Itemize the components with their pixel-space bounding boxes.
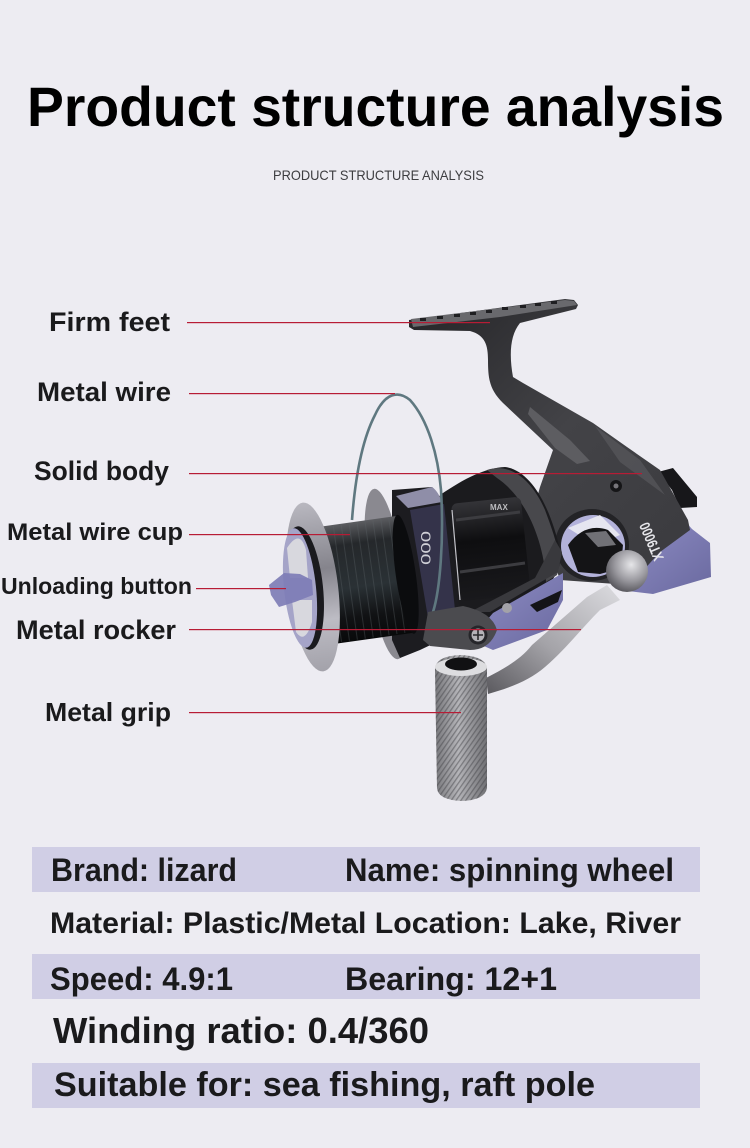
purple bracket plate xyxy=(470,540,563,650)
spec row: brand and name: Brand: lizard xyxy=(51,852,237,888)
reel stand and body xyxy=(409,299,690,585)
rotor head xyxy=(400,467,561,640)
subtitle: PRODUCT STRUCTURE ANALYSIS xyxy=(273,167,484,183)
callout: metal wire: Metal wire xyxy=(37,377,171,407)
callout: metal grip: Metal grip xyxy=(45,697,171,727)
model mark: XT9000 xyxy=(636,520,668,563)
spec row: material and location: Material: Plastic/Metal Location: Lake, River xyxy=(50,907,681,940)
rocker arm xyxy=(486,550,648,694)
callout: unloading button: Unloading button xyxy=(1,573,192,599)
line roller bracket xyxy=(423,606,497,650)
title: Product structure analysis xyxy=(27,75,724,138)
spec row: winding ratio: Winding ratio: 0.4/360 xyxy=(53,1010,429,1051)
spec row: suitable for: Suitable for: sea fishing, raft pole xyxy=(54,1066,595,1104)
fishing reel illustration xyxy=(269,299,711,801)
side lever xyxy=(658,468,697,508)
callout: solid body: Solid body xyxy=(34,456,169,486)
front flange xyxy=(278,500,348,674)
spec row: brand and name: Name: spinning wheel xyxy=(345,852,674,888)
spec row: suitable for xyxy=(32,1063,700,1108)
unloading button xyxy=(269,573,313,607)
spec row: brand and name xyxy=(32,847,700,892)
spool with line xyxy=(317,513,424,645)
callout: metal wire cup: Metal wire cup xyxy=(7,519,183,546)
spool rear flange and collar: 000 xyxy=(418,531,434,565)
callout: firm feet: Firm feet xyxy=(49,307,170,337)
purple side plate xyxy=(620,520,711,594)
wire bail xyxy=(352,395,442,612)
gear hub xyxy=(555,509,629,581)
spool rear flange and collar xyxy=(356,486,462,662)
callout: metal rocker: Metal rocker xyxy=(16,615,176,645)
rotor head: MAX xyxy=(490,503,508,512)
spec row: speed and bearing: Speed: 4.9:1 xyxy=(50,961,233,997)
spec row: speed and bearing: Bearing: 12+1 xyxy=(345,961,557,997)
knurled grip xyxy=(435,655,487,801)
spec row: speed and bearing xyxy=(32,954,700,999)
